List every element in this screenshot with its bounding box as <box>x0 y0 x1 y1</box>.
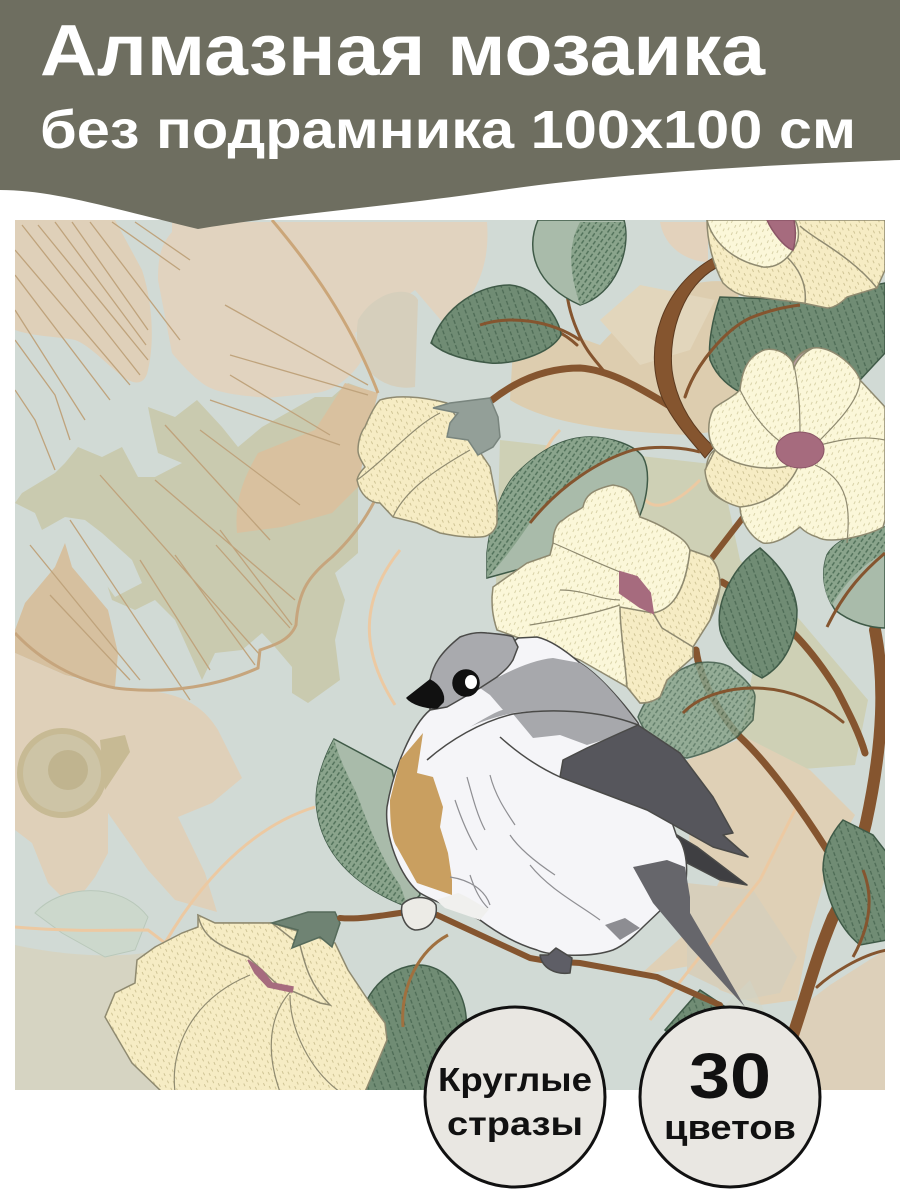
leaf: lower right <box>823 820 887 957</box>
feather strokes <box>450 775 600 920</box>
artwork: bird on flowering branch <box>15 220 887 1092</box>
leaf: big dark right <box>709 283 885 400</box>
badge: round rhinestones <box>425 1007 605 1187</box>
flower: center hanging bud <box>357 397 500 537</box>
leaf: far right <box>824 527 885 628</box>
background <box>15 220 885 1090</box>
faded background shapes <box>15 220 885 1090</box>
branch under bird <box>340 910 720 1005</box>
belly specks <box>605 918 640 940</box>
flower: top right <box>707 220 885 308</box>
leaf: right of bird <box>638 662 755 758</box>
dark tail <box>633 860 745 1007</box>
eye highlight <box>465 675 477 689</box>
pale orange swirls <box>15 430 800 1020</box>
leaf: bottom dark <box>365 935 466 1092</box>
leaf: bottom small <box>664 989 726 1032</box>
bird <box>387 633 748 1007</box>
badge: 30 colours: 30 <box>689 1040 771 1112</box>
foot ring on branch <box>402 898 436 930</box>
beak <box>407 680 443 708</box>
leaf: behind bird <box>316 739 420 907</box>
stems <box>483 232 887 1035</box>
flower: bottom left <box>105 912 387 1092</box>
body <box>387 637 687 955</box>
subtitle: без подрамника 100х100 см <box>40 100 856 160</box>
leaf: top light <box>533 220 626 305</box>
title: Алмазная мозаика <box>40 11 766 91</box>
badge: round rhinestones: Круглые <box>438 1061 592 1098</box>
leaf: middle light <box>487 437 700 578</box>
thick curved stem <box>654 258 716 458</box>
right foot <box>540 948 572 973</box>
dry grass lines <box>15 222 368 700</box>
flower: right large <box>705 348 885 543</box>
leaf: right dark small <box>719 548 797 678</box>
third wing feather <box>677 835 747 885</box>
flower center: right large <box>776 432 824 468</box>
eye <box>453 670 479 696</box>
head <box>429 633 518 710</box>
ankle <box>436 893 490 920</box>
wing outline <box>427 711 638 777</box>
rib of big dark leaf <box>685 305 800 397</box>
tan arc <box>272 220 378 393</box>
rib of leaf right of bird <box>683 688 753 713</box>
flower: middle large <box>492 485 720 703</box>
badge: 30 colours: цветов <box>664 1109 796 1147</box>
rib of dark leaf <box>480 320 580 340</box>
dark wing <box>560 725 748 857</box>
leaf: dark upper <box>431 285 561 363</box>
badge: 30 colours <box>640 1007 820 1187</box>
orange breast <box>390 733 452 895</box>
header banner <box>0 0 900 229</box>
grey mantle <box>470 658 638 727</box>
grey wing band <box>513 711 638 745</box>
badge: round rhinestones: стразы <box>447 1105 583 1142</box>
tan outline curve <box>15 500 375 690</box>
